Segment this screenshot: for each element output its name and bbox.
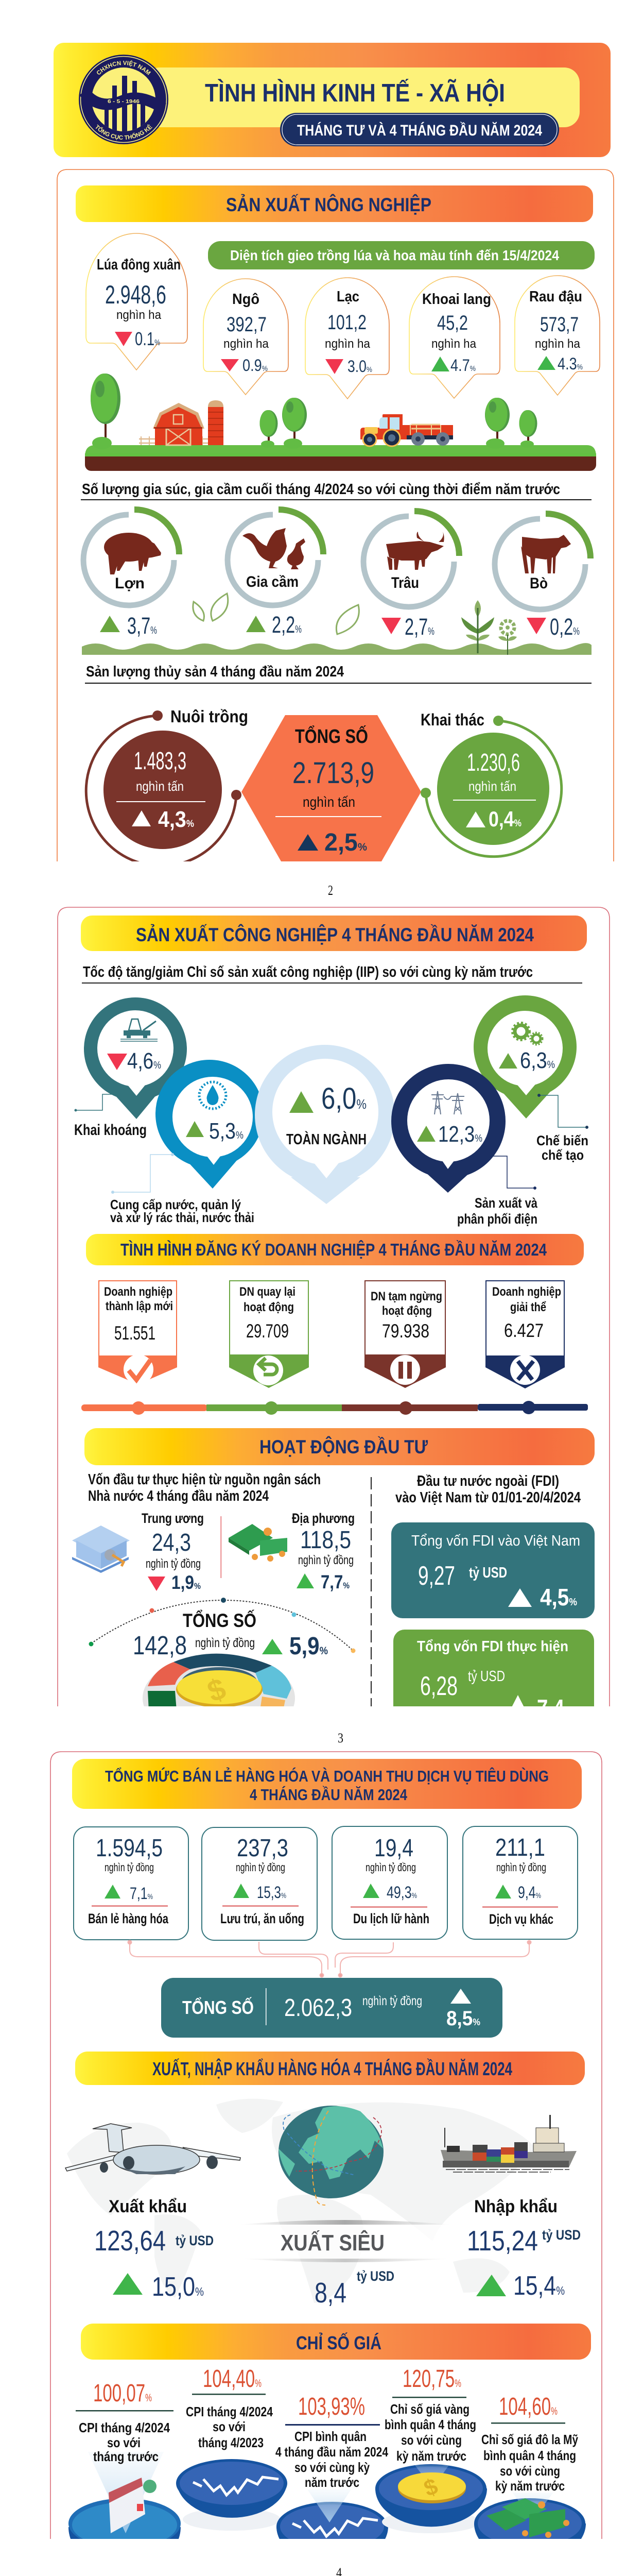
callout: peanut: 101,2: [327, 311, 367, 334]
bowl: US dollar price index: 104,60%: [499, 2393, 558, 2420]
heading: enterprises: [86, 1234, 584, 1265]
pin: manufacturing: chế tạo: [542, 1147, 584, 1163]
bowl: US dollar price index: so với cùng: [500, 2463, 560, 2479]
card: retail goods: 1.594,5: [96, 1835, 163, 1862]
icon: pause: [398, 1362, 412, 1379]
callout: vegetables: Rau đậu: [529, 289, 582, 305]
callout: sweet potato: nghìn ha: [431, 337, 477, 351]
icon: bank vault: [72, 1526, 130, 1573]
bowl: average CPI: [275, 2393, 388, 2565]
card: total FDI: [391, 1522, 595, 1618]
heading: prices: CHỈ SỐ GIÁ: [296, 2332, 381, 2353]
ring: pigs: Lợn: [115, 575, 145, 592]
bowl: US dollar price index: Chỉ số giá đô la Mỹ: [481, 2432, 578, 2447]
icon: money stack: [229, 1524, 287, 1562]
callout: peanut: [305, 278, 389, 399]
pin: whole industry: TOÀN NGÀNH: [286, 1130, 367, 1148]
card: disbursed FDI: 6,28: [420, 1671, 458, 1701]
card: temporarily suspended: [364, 1281, 446, 1388]
icon: coin on donut: [143, 1654, 295, 1742]
panel: retail, trade, prices: [50, 1752, 602, 2571]
callout: peanut: 3.0%: [347, 357, 372, 376]
bowl: gold price index: Chỉ số giá vàng: [390, 2401, 470, 2417]
icon: coin on donut: $: [203, 1672, 230, 1709]
callout: winter-spring rice: 0.1%: [135, 328, 160, 349]
card: retail total: 8,5%: [446, 2007, 480, 2030]
bowl: gold price index: kỳ năm trước: [396, 2448, 466, 2464]
card: retail total: [161, 1978, 502, 2038]
heading: FDI: vào Việt Nam từ 01/01-20/4/2024: [395, 1489, 581, 1506]
subtitle pill: THÁNG TƯ VÀ 4 THÁNG ĐẦU NĂM 2024: [297, 122, 542, 139]
card: total FDI: 4,5%: [540, 1584, 577, 1611]
card: retail goods: nghìn tỷ đồng: [105, 1861, 154, 1874]
block: investment total: 142,8: [133, 1631, 187, 1660]
farm illustration: [85, 374, 596, 471]
icon: banknotes: [486, 2498, 569, 2538]
pin: electricity: 12,3%: [438, 1122, 482, 1147]
heading: state budget investment: Vốn đầu tư thực hiện từ nguồn ngân sách: [88, 1471, 321, 1488]
card: other services: 211,1: [495, 1834, 545, 1861]
ring: cattle: [495, 514, 590, 640]
green subheading: planted area: [208, 241, 595, 269]
card: disbursed FDI: 7,4%: [537, 1694, 572, 1721]
bowl: monthly CPI: tháng trước: [93, 2449, 159, 2464]
card: temporarily suspended: 79.938: [382, 1320, 429, 1342]
card: fishery total: TỔNG SỐ: [295, 724, 368, 748]
block: investment total: nghìn tỷ đồng: [195, 1636, 255, 1650]
block: local: nghìn tỷ đồng: [298, 1553, 354, 1567]
callout: winter-spring rice: 2.948,6: [105, 280, 166, 309]
icon: statistics office logo: TỔNG CỤC THỐNG KÊ: [96, 125, 152, 140]
callout: vegetables: [515, 276, 600, 395]
heading: state budget investment: Nhà nước 4 tháng đầu năm 2024: [88, 1488, 269, 1504]
heading: agriculture: [76, 185, 593, 222]
card: accommodation and food: 15,3%: [257, 1883, 286, 1902]
title: TÌNH HÌNH KINH TẾ - XÃ HỘI: [205, 79, 505, 107]
page number 3: 3: [338, 1731, 343, 1745]
block: central: 24,3: [152, 1529, 191, 1556]
card: accommodation and food: [202, 1827, 317, 1940]
subtitle pill: [280, 113, 559, 146]
bowl: gold price index: 120,75%: [403, 2365, 461, 2393]
pin: water supply: và xử lý rác thải, nước thải: [110, 1210, 254, 1225]
heading: industry: SẢN XUẤT CÔNG NGHIỆP 4 THÁNG ĐẦU NĂM 2024: [136, 924, 534, 945]
bowl: gold price index: so với cùng: [401, 2432, 462, 2448]
panel: industry, enterprises, investment: [58, 907, 610, 1742]
card: capture fishery: 0,4%: [489, 807, 521, 831]
icon: buffalo: [386, 532, 444, 570]
card: fishery total: 2,5%: [324, 829, 367, 856]
bowl: year on year CPI: [176, 2365, 287, 2531]
ring: pigs: [83, 510, 179, 639]
block: imports: 115,24: [467, 2225, 538, 2257]
heading: enterprises: TÌNH HÌNH ĐĂNG KÝ DOANH NGHIỆP 4 THÁNG ĐẦU NĂM 2024: [120, 1240, 547, 1259]
bowl: gold price index: bình quân 4 tháng: [385, 2417, 476, 2432]
card: newly established: [98, 1281, 177, 1384]
block: trade surplus: XUẤT SIÊU: [281, 2230, 385, 2256]
card: tourism: Du lịch lữ hành: [353, 1911, 429, 1926]
block: local: 7,7%: [321, 1571, 350, 1592]
card: aquaculture: 1.483,3: [134, 748, 186, 775]
card: accommodation and food: 237,3: [237, 1835, 288, 1862]
icon: cargo plane: [65, 2124, 240, 2174]
card: accommodation and food: nghìn tỷ đồng: [236, 1861, 285, 1874]
bowl: average CPI: CPI bình quân: [294, 2429, 367, 2444]
card: capture fishery: 1.230,6: [467, 749, 520, 776]
pin: manufacturing: 6,3%: [520, 1048, 555, 1073]
icon: oil rig: [120, 1019, 158, 1041]
block: central: [72, 1511, 204, 1593]
icon: globe: [279, 2106, 384, 2205]
bowl: monthly CPI: so với: [107, 2435, 141, 2450]
card: returned to operation: 29.709: [246, 1320, 289, 1342]
card: disbursed FDI: Tổng vốn FDI thực hiện: [417, 1638, 568, 1655]
card: fishery total: [241, 715, 421, 869]
decoration: leaves and plants: [82, 594, 592, 655]
pin: manufacturing: [474, 995, 588, 1163]
bowl: average CPI: 4 tháng đầu năm 2024: [275, 2444, 388, 2460]
block: exports: 123,64: [94, 2225, 166, 2257]
card: dissolved: [485, 1281, 565, 1388]
icon: barn: [139, 400, 223, 445]
block: local: 118,5: [300, 1527, 351, 1554]
bowl: average CPI: so với cùng kỳ: [294, 2460, 370, 2475]
heading: retail: [72, 1759, 582, 1809]
ring: poultry: [228, 510, 323, 638]
icon: gold coin: $: [421, 2473, 441, 2502]
header banner: [54, 43, 611, 157]
bowl: year on year CPI: CPI tháng 4/2024: [186, 2404, 273, 2419]
heading: prices: [81, 2324, 591, 2360]
pin: electricity: Sản xuất và: [475, 1195, 538, 1211]
card: retail goods: 7,1%: [130, 1884, 153, 1903]
card: aquaculture: [86, 707, 248, 866]
card: fishery total: nghìn tấn: [303, 794, 355, 810]
pin: electricity: [391, 1064, 538, 1227]
heading: fishery: Sản lượng thủy sản 4 tháng đầu năm 2024: [86, 664, 344, 680]
block: central: Trung ương: [142, 1511, 204, 1526]
heading: retail: 4 THÁNG ĐẦU NĂM 2024: [250, 1786, 408, 1804]
card: newly established: Doanh nghiệp: [104, 1285, 172, 1299]
card: aquaculture: Nuôi trồng: [170, 707, 248, 726]
callout: maize: [203, 279, 288, 395]
card: accommodation and food: Lưu trú, ăn uống: [220, 1911, 304, 1926]
card: tourism: 19,4: [374, 1835, 413, 1862]
icon: rooster and duck: [242, 528, 305, 569]
bowl: US dollar price index: kỳ năm trước: [495, 2478, 565, 2494]
pin: mining: [74, 997, 187, 1139]
heading: livestock: Số lượng gia súc, gia cầm cuối tháng 4/2024 so với cùng thời điểm năm trước: [82, 481, 560, 498]
block: investment total: TỔNG SỐ: [183, 1609, 256, 1631]
callout: maize: 0.9%: [242, 356, 268, 375]
pin: water supply: Cung cấp nước, quản lý: [110, 1197, 241, 1212]
pin: whole industry: [255, 1045, 395, 1204]
card: dissolved: giải thể: [510, 1300, 546, 1314]
callout: winter-spring rice: nghìn ha: [116, 308, 162, 322]
callout: sweet potato: 45,2: [437, 312, 468, 334]
card: fishery total: 2.713,9: [292, 756, 374, 790]
icon: statistics office logo: [79, 55, 168, 144]
card: dissolved: Doanh nghiệp: [492, 1285, 561, 1299]
callout: peanut: nghìn ha: [325, 337, 371, 351]
card: capture fishery: [421, 710, 562, 857]
icon: cow: [521, 535, 571, 573]
subheading: IIP: Tốc độ tăng/giảm Chỉ số sản xuất công nghiệp (IIP) so với cùng kỳ năm trước: [83, 964, 533, 980]
card: returned to operation: [229, 1281, 309, 1388]
connectors to total: [128, 1940, 531, 1977]
card: retail total: TỔNG SỐ: [182, 1996, 254, 2018]
card: total FDI: tỷ USD: [469, 1565, 507, 1581]
card: other services: 9,4%: [518, 1883, 541, 1902]
heading: trade: [75, 2052, 585, 2085]
heading: state budget investment: [88, 1471, 321, 1504]
pin: water supply: [110, 1060, 264, 1225]
bowl: average CPI: 103,93%: [298, 2393, 365, 2420]
icon: water drop: [199, 1082, 226, 1109]
block: investment total: [89, 1598, 355, 1742]
heading: investment: [84, 1428, 595, 1465]
ring: pigs: 3,7%: [127, 613, 157, 639]
callout: vegetables: nghìn ha: [535, 337, 581, 351]
ring: cattle: 0,2%: [550, 614, 580, 640]
card: other services: Dịch vụ khác: [489, 1911, 553, 1927]
card: other services: [463, 1826, 578, 1939]
timeline bar: [81, 1401, 588, 1415]
card: retail goods: Bán lẻ hàng hóa: [88, 1911, 169, 1926]
card: total FDI: 9,27: [418, 1561, 455, 1591]
card: disbursed FDI: [393, 1630, 594, 1725]
block: exports: 15,0%: [152, 2272, 204, 2302]
callout: winter-spring rice: [86, 233, 187, 370]
card: returned to operation: hoạt động: [244, 1300, 294, 1314]
heading: FDI: Đầu tư nước ngoài (FDI): [417, 1473, 559, 1489]
callout: sweet potato: 4.7%: [450, 356, 476, 375]
block: trade surplus: 8,4: [315, 2277, 346, 2309]
card: tourism: nghìn tỷ đồng: [366, 1861, 416, 1874]
block: imports: Nhập khẩu: [474, 2197, 558, 2216]
bowl: monthly CPI: 100,07%: [93, 2380, 152, 2407]
block: exports: Xuất khẩu: [109, 2197, 187, 2216]
ring: poultry: 2,2%: [272, 612, 302, 638]
card: newly established: thành lập mới: [106, 1299, 173, 1313]
icon: gears: [512, 1023, 543, 1045]
callout: sweet potato: Khoai lang: [422, 291, 491, 308]
bowl: monthly CPI: [68, 2380, 181, 2571]
icon: power towers: [431, 1091, 464, 1114]
bowl: year on year CPI: so với: [213, 2419, 246, 2434]
pin: whole industry: 6,0%: [321, 1082, 367, 1115]
card: aquaculture: 4,3%: [158, 807, 194, 832]
callout: peanut: Lạc: [337, 289, 359, 305]
card: tourism: 49,3%: [387, 1883, 417, 1902]
pin: water supply: 5,3%: [209, 1118, 244, 1144]
icon: calendar: [109, 2478, 156, 2533]
icon: return arrow: [259, 1358, 277, 1375]
ring: buffalo: [363, 511, 459, 640]
pin: mining: Khai khoáng: [74, 1122, 147, 1139]
icon: pig: [104, 533, 161, 574]
callout: maize: 392,7: [227, 313, 267, 336]
card: other services: nghìn tỷ đồng: [496, 1861, 546, 1874]
icon: check: [129, 1360, 150, 1380]
bowl: year on year CPI: 104,40%: [203, 2365, 262, 2393]
block: imports: tỷ USD: [542, 2227, 581, 2243]
bowl: US dollar price index: [474, 2393, 586, 2562]
callout: vegetables: 4.3%: [558, 354, 583, 373]
ring: buffalo: Trâu: [391, 574, 419, 591]
bowl: monthly CPI: CPI tháng 4/2024: [79, 2420, 170, 2435]
card: dissolved: 6.427: [504, 1320, 544, 1341]
heading: retail: TỔNG MỨC BÁN LẺ HÀNG HÓA VÀ DOANH THU DỊCH VỤ TIÊU DÙNG: [105, 1767, 549, 1785]
block: central: nghìn tỷ đồng: [146, 1557, 201, 1571]
card: disbursed FDI: tỷ USD: [468, 1668, 505, 1685]
card: returned to operation: DN quay lại: [239, 1285, 295, 1299]
panel: agriculture: [57, 170, 614, 869]
icon: cross: [518, 1361, 533, 1380]
callout: vegetables: 573,7: [540, 313, 579, 336]
card: capture fishery: Khai thác: [421, 710, 484, 729]
block: investment total: 5,9%: [289, 1633, 328, 1660]
ring: buffalo: 2,7%: [405, 614, 434, 640]
card: retail total: nghìn tỷ đồng: [362, 1994, 422, 2008]
bowl: year on year CPI: tháng 4/2023: [198, 2435, 264, 2450]
title ribbon: [144, 67, 580, 127]
card: temporarily suspended: hoạt động: [382, 1304, 432, 1318]
icon: statistics office logo: 6 - 5 - 1946: [108, 99, 140, 105]
icon: chart line: [193, 2477, 279, 2495]
page number 2: 2: [328, 883, 333, 898]
callout: maize: nghìn ha: [223, 337, 269, 351]
card: temporarily suspended: DN tạm ngừng: [371, 1290, 442, 1303]
callout: sweet potato: [409, 277, 500, 398]
card: capture fishery: nghìn tấn: [468, 778, 516, 794]
ring: poultry: Gia cầm: [246, 573, 299, 590]
callout: winter-spring rice: Lúa đông xuân: [97, 257, 181, 273]
heading: industry: [81, 916, 587, 951]
block: exports: [94, 2197, 214, 2302]
callout: maize: Ngô: [232, 291, 259, 308]
block: local: [229, 1511, 355, 1592]
world map background: [67, 2099, 535, 2303]
heading: agriculture: SẢN XUẤT NÔNG NGHIỆP: [226, 194, 431, 215]
block: central: 1,9%: [171, 1572, 201, 1593]
icon: container ship: [441, 2115, 577, 2172]
block: trade surplus: tỷ USD: [357, 2268, 394, 2284]
ring: cattle: Bò: [530, 575, 548, 592]
block: imports: 15,4%: [513, 2271, 565, 2301]
card: tourism: [332, 1826, 447, 1939]
card: total FDI: Tổng vốn FDI vào Việt Nam: [411, 1533, 580, 1549]
card: retail goods: [74, 1827, 188, 1940]
block: exports: tỷ USD: [176, 2233, 214, 2248]
bowl: average CPI: năm trước: [305, 2475, 359, 2490]
pin: manufacturing: Chế biến: [536, 1133, 588, 1148]
icon: statistics office logo: CHXHCN VIỆT NAM: [97, 60, 151, 75]
heading: investment: HOẠT ĐỘNG ĐẦU TƯ: [259, 1436, 428, 1458]
green subheading: planted area: Diện tích gieo trồng lúa và hoa màu tính đến 15/4/2024: [230, 247, 559, 263]
pin: electricity: phân phối điện: [457, 1211, 537, 1227]
bowl: gold price index: [375, 2365, 487, 2533]
card: newly established: 51.551: [114, 1323, 155, 1344]
card: retail total: 2.062,3: [284, 1994, 352, 2022]
block: local: Địa phương: [292, 1511, 355, 1526]
pin: mining: 4,6%: [127, 1048, 161, 1074]
card: aquaculture: nghìn tấn: [136, 778, 184, 794]
icon: tractor: [360, 414, 453, 446]
heading: FDI: [395, 1473, 581, 1506]
block: trade surplus: [239, 2220, 451, 2309]
block: imports: [467, 2197, 581, 2301]
icon: gold coin: [398, 2472, 466, 2503]
bowl: US dollar price index: bình quân 4 tháng: [483, 2448, 576, 2463]
